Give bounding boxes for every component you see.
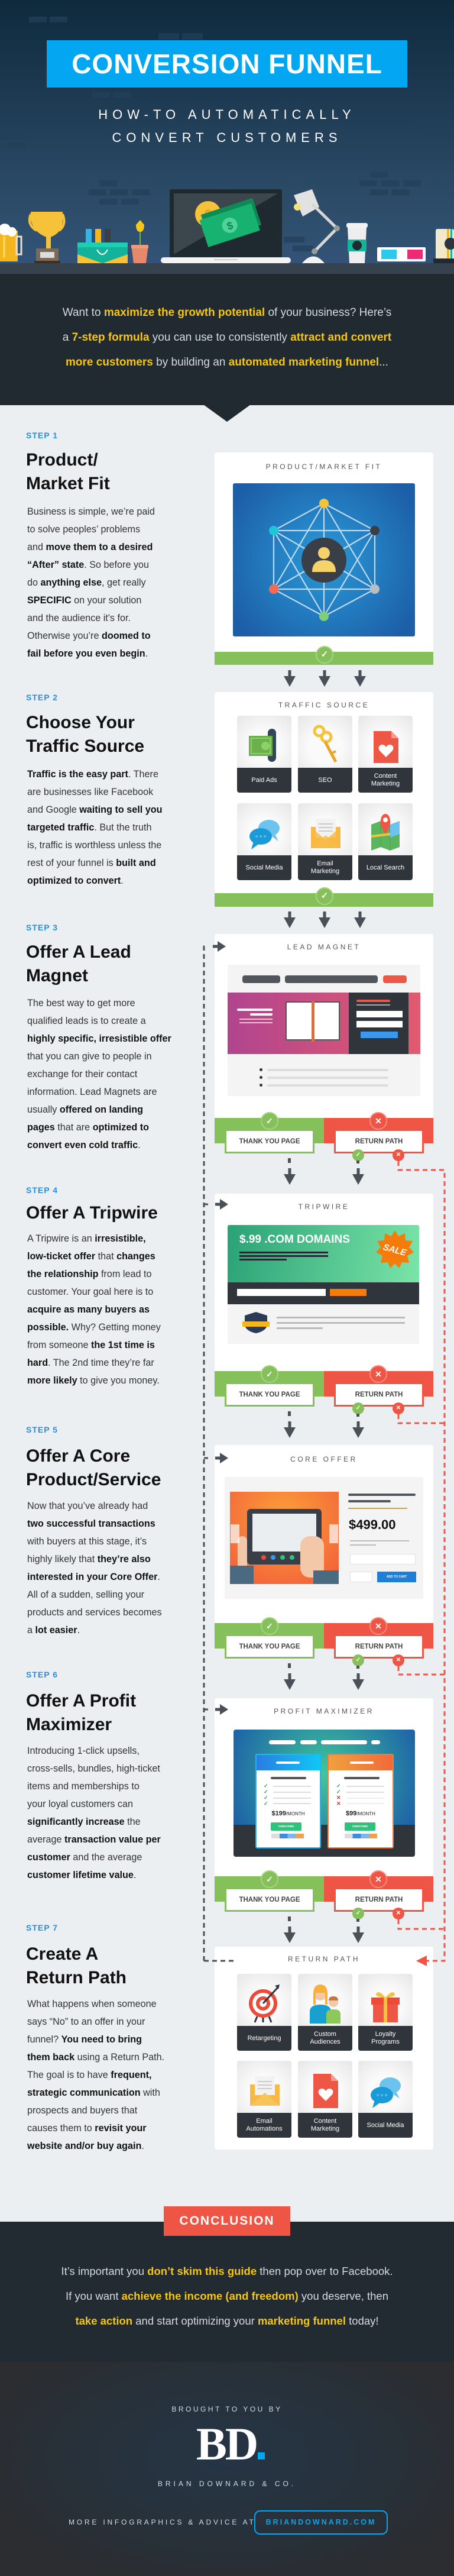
- text: ✕: [396, 1152, 401, 1158]
- subtitle: [98, 107, 356, 145]
- green bar: pmf: [215, 652, 433, 665]
- panel: return path: RETURN PATH: [288, 1955, 360, 1963]
- tile: custom audiences: Audiences: [310, 2038, 340, 2045]
- icon: beer: [0, 224, 21, 261]
- icon: laptop with money: $: [205, 207, 212, 222]
- step 6 text: Introducing 1-click upsells,: [27, 1746, 140, 1756]
- tile: paid ads: [237, 716, 291, 793]
- icon: check traffic: [316, 887, 333, 905]
- step 7 text: prospects and buyers that: [27, 2105, 137, 2116]
- decision bar: lead magnet: [215, 1112, 433, 1161]
- tripwire mockup: SALE: [382, 1242, 408, 1258]
- icon: lamp: [294, 189, 340, 263]
- tile: email marketing: [298, 803, 352, 880]
- intro text: Want to maximize the growth potential of your business? Here’s: [63, 306, 391, 319]
- step 1 text: and the audience it's for.: [27, 613, 131, 623]
- company name: BRIAN DOWNARD & CO.: [158, 2480, 296, 2488]
- step 4 text: from someone the 1st time is: [27, 1340, 155, 1350]
- product page mockup: [225, 1477, 423, 1599]
- step 5 text: interested in your Core Offer.: [27, 1572, 160, 1582]
- tile: retargeting: [237, 1974, 291, 2051]
- decision bar: core offer: [215, 1617, 433, 1666]
- tile: local search: Local Search: [367, 864, 404, 871]
- subtitle: CONVERT CUSTOMERS: [112, 130, 342, 145]
- pricing card blue: ✓: [264, 1801, 268, 1806]
- decision bar: core offer: ✓: [266, 1621, 273, 1631]
- step 6 text: customer lifetime value.: [27, 1870, 136, 1880]
- step 3 text: STEP 3: [26, 923, 58, 932]
- pricing card blue: [255, 1754, 321, 1848]
- step 5 text: All of a sudden, selling your: [27, 1589, 144, 1600]
- step 7 text: them back using a Return Path.: [27, 2052, 164, 2063]
- step 3 text: pages that are optimized to: [27, 1122, 149, 1133]
- conclusion text: take action and start optimizing your marketing funnel today!: [75, 2315, 379, 2327]
- step 1 text: SPECIFIC on your solution: [27, 595, 141, 606]
- tile: content marketing return: Marketing: [311, 2125, 339, 2132]
- brought to you by: BROUGHT TO YOU BY: [171, 2405, 283, 2413]
- step 7 text: [26, 1923, 164, 2151]
- conclusion panel: [0, 2222, 454, 2362]
- step 5 text: highly likely that they’re also: [27, 1554, 151, 1565]
- step 3 text: Magnet: [26, 966, 88, 985]
- step 3 text: exchange for their contact: [27, 1069, 137, 1079]
- step 7 text: causes them to revisit your: [27, 2123, 147, 2134]
- decision bar: lead magnet: RETURN PATH: [355, 1138, 403, 1145]
- text: ✕: [396, 1405, 401, 1411]
- decision bar: profit maximizer: THANK YOU PAGE: [239, 1896, 300, 1903]
- step 3 text: Offer A Lead: [26, 942, 131, 962]
- step 2 text: STEP 2: [26, 693, 58, 702]
- pricing card orange: [327, 1754, 394, 1848]
- decision bar: lead magnet: ✕: [375, 1116, 382, 1126]
- step 1 text: do anything else, get really: [27, 577, 146, 588]
- tripwire mockup: $.99 .COM DOMAINS: [239, 1233, 350, 1246]
- step 5 text: [26, 1425, 162, 1636]
- conclusion text: [61, 2265, 393, 2327]
- intro text: more customers by building an automated marketing funnel...: [66, 356, 388, 369]
- tile: email marketing: Marketing: [311, 868, 339, 875]
- decision bar: tripwire: ✕: [375, 1369, 382, 1379]
- panel: tripwire: TRIPWIRE: [299, 1203, 349, 1211]
- tripwire mockup: [228, 1225, 419, 1344]
- step 5 text: STEP 5: [26, 1425, 58, 1434]
- decision bar: profit maximizer: ✓: [266, 1874, 273, 1884]
- icon: coffee cup: [346, 223, 368, 263]
- tile: loyalty programs: Programs: [371, 2038, 400, 2045]
- step 3 text: qualified leads is to create a: [27, 1016, 146, 1026]
- step 1 text: [26, 431, 155, 659]
- step 7 text: The goal is to have frequent,: [27, 2070, 152, 2080]
- title banner: [47, 40, 407, 88]
- step 7 text: strategic communication with: [27, 2087, 160, 2098]
- step 5 text: products and services becomes: [27, 1607, 162, 1618]
- step 3 text: convert even cold traffic.: [27, 1140, 141, 1150]
- intro panel: [0, 274, 454, 405]
- pricing card blue: ✓: [264, 1795, 268, 1801]
- panel: traffic source: TRAFFIC SOURCE: [278, 701, 369, 709]
- step 2 text: are businesses like Facebook: [27, 787, 153, 797]
- step 5 text: two successful transactions: [27, 1518, 155, 1529]
- icon: box with tubes: [77, 229, 128, 263]
- panel: core offer: [215, 1445, 433, 1649]
- pricing mockup: [234, 1730, 415, 1857]
- intro text: [63, 306, 391, 369]
- icon: laptop with money: [161, 189, 291, 263]
- step 2 text: Traffic Source: [26, 736, 144, 756]
- header background: [0, 0, 454, 274]
- tile: content marketing: [358, 716, 413, 793]
- website button: BRIANDOWNARD.COM: [266, 2518, 376, 2526]
- tile: social media return: [358, 2061, 413, 2138]
- intro text: a 7-step formula you can use to consistently attract and convert: [63, 331, 391, 344]
- step 6 text: Offer A Profit: [26, 1691, 136, 1711]
- product page mockup: ADD TO CART: [387, 1575, 407, 1579]
- icon: trophy: [30, 212, 64, 263]
- step 6 text: STEP 6: [26, 1670, 58, 1679]
- tile: content marketing return: Content: [314, 2118, 336, 2125]
- step 4 text: acquire as many buyers as: [27, 1304, 150, 1315]
- step 6 text: [26, 1670, 161, 1880]
- decision bar: lead magnet: THANK YOU PAGE: [239, 1138, 300, 1145]
- step 1 text: Business is simple, we’re paid: [27, 506, 155, 517]
- step 2 text: Traffic is the easy part. There: [27, 769, 158, 780]
- step 3 text: The best way to get more: [27, 998, 135, 1009]
- step 1 text: fail before you even begin.: [27, 648, 148, 659]
- tile: email marketing: Email: [317, 860, 333, 867]
- step 1 text: and move them to a desired: [27, 542, 153, 552]
- decision bar: profit maximizer: ✕: [375, 1874, 382, 1884]
- decision bar: tripwire: [215, 1365, 433, 1414]
- panel: profit maximizer: PROFIT MAXIMIZER: [274, 1707, 374, 1715]
- panel: traffic source: [215, 692, 433, 907]
- desk illustration: [0, 189, 454, 274]
- step 5 text: a lot easier.: [27, 1625, 80, 1636]
- step 1 text: STEP 1: [26, 431, 58, 440]
- tile: retargeting: Retargeting: [248, 2035, 281, 2042]
- footer: [0, 2362, 454, 2576]
- icon: plant: [131, 220, 148, 263]
- text: ✕: [396, 1657, 401, 1663]
- pricing card blue: ✓: [264, 1789, 268, 1795]
- step 4 text: more likely to give you money.: [27, 1375, 160, 1386]
- step 2 text: targeted traffic. But the truth: [27, 822, 152, 833]
- step 4 text: low-ticket offer that changes: [27, 1251, 155, 1262]
- step 7 text: website and/or buy again.: [27, 2141, 144, 2151]
- panel: tripwire: [215, 1194, 433, 1397]
- step 5 text: with buyers at this stage, it’s: [27, 1536, 147, 1547]
- text: ✓: [356, 1405, 361, 1411]
- conclusion text: It’s important you don’t skim this guide then pop over to Facebook.: [61, 2265, 393, 2277]
- conclusion label: CONCLUSION: [179, 2214, 275, 2228]
- step 3 text: [26, 923, 171, 1150]
- step 4 text: the relationship from lead to: [27, 1269, 152, 1279]
- shelf: [0, 263, 454, 280]
- step 4 text: hard. The 2nd time they’re far: [27, 1358, 154, 1368]
- pricing card blue: $199/MONTH: [271, 1810, 305, 1817]
- product page mockup: $499.00: [349, 1517, 396, 1532]
- step 3 text: highly specific, irresistible offer: [27, 1033, 171, 1044]
- tile: email automations: [237, 2061, 291, 2138]
- tile: email automations: Email: [256, 2118, 273, 2125]
- step 7 text: says “No” to an offer in your: [27, 2016, 145, 2027]
- step 2 text: optimized to convert.: [27, 875, 124, 886]
- step 3 text: that you can give to people in: [27, 1051, 152, 1062]
- decision bar: tripwire: ✓: [266, 1369, 273, 1379]
- decision bar: profit maximizer: RETURN PATH: [355, 1896, 403, 1903]
- step 6 text: items and memberships to: [27, 1781, 140, 1792]
- step 7 text: STEP 7: [26, 1923, 58, 1932]
- step 4 text: possible. Why? Getting money: [27, 1322, 161, 1333]
- tile: custom audiences: [298, 1974, 352, 2051]
- tile: paid ads: Paid Ads: [251, 776, 277, 783]
- decision bar: profit maximizer: [215, 1870, 433, 1919]
- tile: content marketing: Content: [374, 773, 397, 780]
- step 1 text: to solve peoples’ problems: [27, 524, 140, 535]
- step 3 text: usually offered on landing: [27, 1104, 143, 1115]
- tile: seo: [298, 716, 352, 793]
- icon: check pmf: [316, 646, 333, 664]
- network diagram: [233, 483, 415, 636]
- pricing card orange: ✕: [336, 1801, 341, 1806]
- pricing card orange: ✓: [336, 1789, 341, 1795]
- icon: check pmf: ✓: [321, 649, 328, 660]
- panel: return path: [215, 1947, 433, 2150]
- panel: core offer: CORE OFFER: [290, 1455, 358, 1463]
- panel: product/market fit: PRODUCT/MARKET FIT: [266, 463, 382, 471]
- text: ✓: [356, 1910, 361, 1916]
- subtitle: HOW-TO AUTOMATICALLY: [98, 107, 356, 122]
- decision bar: tripwire: RETURN PATH: [355, 1391, 403, 1398]
- green bar: traffic: [215, 893, 433, 907]
- step 4 text: Offer A Tripwire: [26, 1203, 158, 1223]
- website button: [254, 2510, 388, 2535]
- step 2 text: and Google waiting to sell you: [27, 804, 163, 815]
- step 6 text: average transaction value per: [27, 1834, 161, 1845]
- text: ✓: [356, 1152, 361, 1158]
- conclusion text: If you want achieve the income (and freedom) you deserve, then: [66, 2290, 388, 2302]
- step 1 text: “After” state. So before you: [27, 560, 149, 570]
- panel: lead magnet: LEAD MAGNET: [287, 943, 361, 951]
- step 7 text: Return Path: [26, 1968, 127, 1987]
- tile: content marketing return: [298, 2061, 352, 2138]
- step 4 text: [26, 1185, 161, 1386]
- icon: check traffic: ✓: [321, 891, 328, 901]
- step 6 text: your loyal customers can: [27, 1799, 133, 1809]
- tile: social media: [237, 803, 291, 880]
- step 6 text: Maximizer: [26, 1715, 112, 1734]
- pricing card blue: SUBSCRIBE: [278, 1825, 294, 1828]
- step 4 text: A Tripwire is an irresistible,: [27, 1233, 146, 1244]
- tile: loyalty programs: Loyalty: [375, 2031, 395, 2038]
- step 1 text: Product/: [26, 450, 98, 470]
- step 1 text: Market Fit: [26, 474, 110, 493]
- step 2 text: Choose Your: [26, 713, 135, 732]
- tile: social media: Social Media: [246, 864, 283, 871]
- step 5 text: Offer A Core: [26, 1446, 130, 1466]
- notch arrow: [205, 405, 249, 422]
- step 2 text: is, traffic is worthless unless the: [27, 840, 161, 851]
- step 3 text: information. Lead Magnets are: [27, 1087, 157, 1097]
- decision bar: core offer: RETURN PATH: [355, 1643, 403, 1650]
- text: ✕: [396, 1910, 401, 1916]
- tile: local search: [358, 803, 413, 880]
- step 7 text: funnel? You need to bring: [27, 2034, 142, 2045]
- tile: social media return: Social Media: [367, 2121, 404, 2128]
- tile: custom audiences: Custom: [314, 2031, 336, 2038]
- logo BD: BD: [196, 2418, 257, 2470]
- panel: product/market fit: [215, 453, 433, 665]
- step 6 text: customer and the average: [27, 1852, 142, 1863]
- step 2 text: [26, 693, 163, 886]
- pricing card orange: SUBSCRIBE: [352, 1825, 368, 1828]
- text: ✓: [356, 1657, 361, 1663]
- title banner: CONVERSION FUNNEL: [72, 49, 382, 79]
- decision bar: tripwire: THANK YOU PAGE: [239, 1391, 300, 1398]
- step 6 text: cross-sells, bundles, high-ticket: [27, 1763, 160, 1774]
- icon: 3D glasses: [377, 247, 426, 261]
- step 1 text: Otherwise you’re doomed to: [27, 631, 151, 641]
- step 6 text: significantly increase the: [27, 1817, 141, 1827]
- pricing card orange: ✕: [336, 1795, 341, 1801]
- pricing card orange: ✓: [336, 1783, 341, 1789]
- panel: profit maximizer: [215, 1698, 433, 1902]
- step 2 text: rest of your funnel is built and: [27, 858, 156, 868]
- step 4 text: STEP 4: [26, 1185, 58, 1195]
- decision bar: core offer: ✕: [375, 1621, 382, 1631]
- step 4 text: customer. Your goal here is to: [27, 1287, 153, 1297]
- step 7 text: Create A: [26, 1944, 98, 1964]
- conclusion label: [164, 2206, 290, 2236]
- decision bar: core offer: THANK YOU PAGE: [239, 1643, 300, 1650]
- step 7 text: What happens when someone: [27, 1999, 157, 2009]
- pricing card blue: ✓: [264, 1783, 268, 1789]
- tile: loyalty programs: [358, 1974, 413, 2051]
- decision bar: lead magnet: ✓: [266, 1116, 273, 1126]
- landing page mockup: [228, 965, 420, 1096]
- step 5 text: Product/Service: [26, 1470, 161, 1489]
- icon: camera: [433, 229, 454, 264]
- tile: email automations: Automations: [246, 2125, 283, 2132]
- tile: content marketing: Marketing: [371, 780, 400, 787]
- tile: seo: SEO: [318, 776, 332, 783]
- icon: laptop with money: $: [225, 219, 235, 232]
- more infographics line: MORE INFOGRAPHICS & ADVICE AT: [69, 2518, 256, 2526]
- pricing card orange: $99/MONTH: [346, 1810, 375, 1817]
- panel: lead magnet: [215, 934, 433, 1144]
- step 5 text: Now that you’ve already had: [27, 1501, 148, 1511]
